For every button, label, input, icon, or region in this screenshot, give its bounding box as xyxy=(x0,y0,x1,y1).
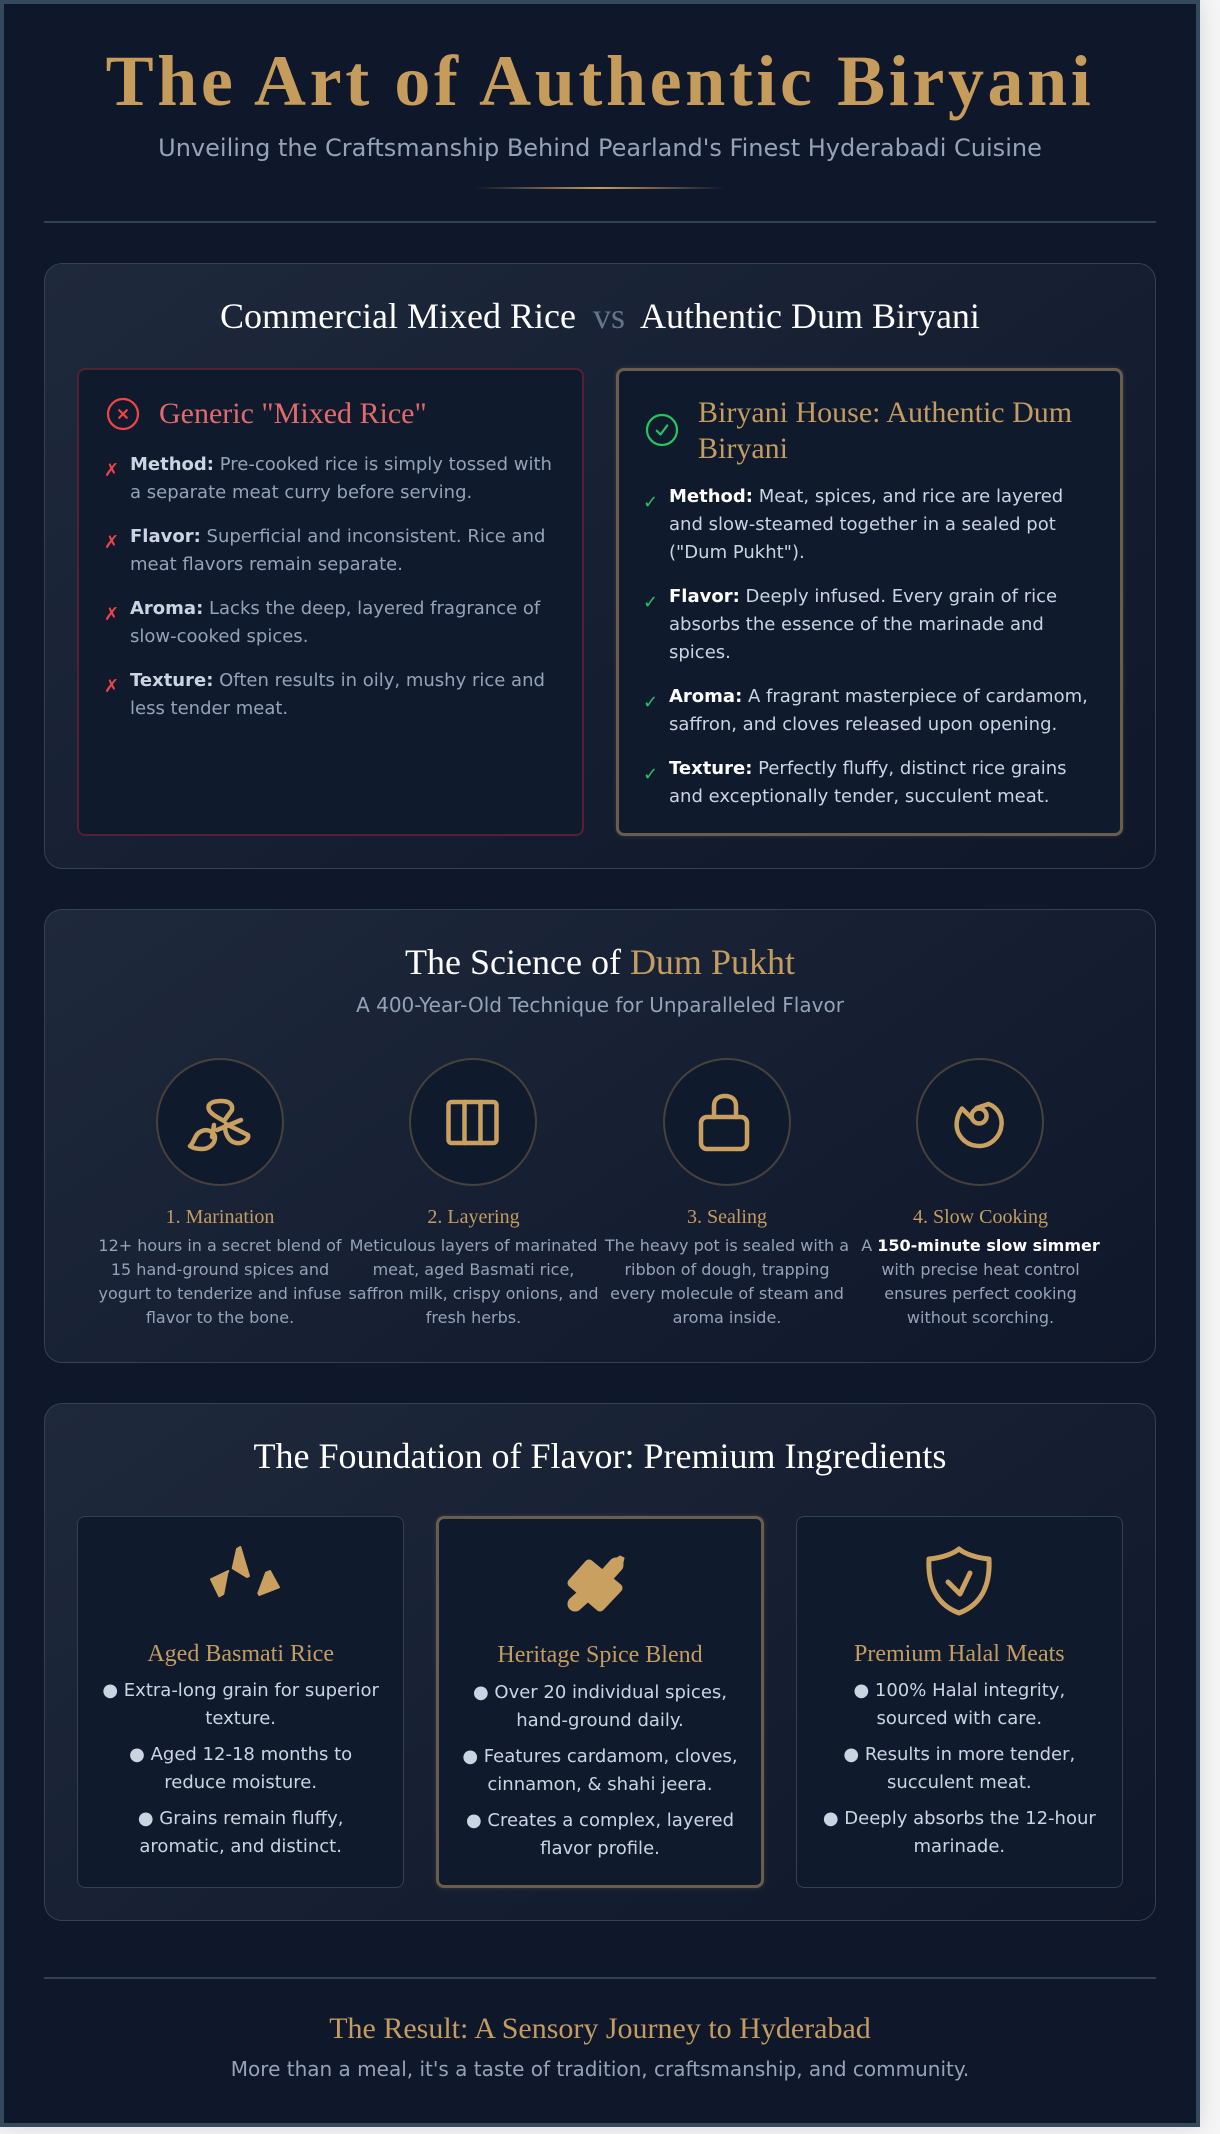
card: generic mixed rice: ✗ xyxy=(104,604,119,625)
item: flavor xyxy=(643,586,1057,663)
heading: science: The Science of Dum Pukht xyxy=(405,942,795,982)
icon: cross circle xyxy=(106,398,140,430)
item xyxy=(843,1744,1075,1793)
footer text: More than a meal, it's a taste of tradition, craftsmanship, and community. xyxy=(231,2057,969,2081)
card: premium halal meats xyxy=(796,1516,1123,1888)
item: aroma: Aroma: Lacks the deep, layered fragrance of xyxy=(130,598,540,619)
card: aged basmati rice xyxy=(77,1516,404,1888)
item: flavor profile. xyxy=(540,1838,660,1859)
item xyxy=(129,1744,352,1793)
step text: fresh herbs. xyxy=(426,1308,521,1327)
step text: ensures perfect cooking xyxy=(884,1284,1077,1303)
card title: Biryani House: Authentic Dum xyxy=(698,396,1072,429)
step text: meat, aged Basmati rice, xyxy=(373,1260,574,1279)
item xyxy=(102,1680,379,1729)
icon: lock xyxy=(662,1058,790,1186)
panel: comparison xyxy=(44,263,1156,869)
step text: without scorching. xyxy=(907,1308,1054,1327)
item: aroma: saffron, and cloves released upon opening. xyxy=(669,714,1057,735)
item: method xyxy=(104,454,552,503)
item: method: and slow-steamed together in a sealed pot xyxy=(669,514,1056,535)
item: ● Deeply absorbs the 12-hour xyxy=(823,1808,1096,1829)
step text: A 150-minute slow simmer xyxy=(861,1236,1100,1255)
step text: aroma inside. xyxy=(673,1308,781,1327)
step title: 3. Sealing xyxy=(687,1206,767,1228)
item: texture. xyxy=(205,1708,276,1729)
icon: check circle xyxy=(646,414,678,446)
item: texture: Texture: Often results in oily, mushy rice and xyxy=(130,670,545,691)
icon: layers xyxy=(409,1058,537,1186)
step text: Meticulous layers of marinated xyxy=(350,1236,597,1255)
item: aroma xyxy=(104,598,541,647)
item xyxy=(138,1808,343,1857)
title: The Art of Authentic Biryani xyxy=(106,41,1094,121)
item: ● Grains remain fluffy, xyxy=(138,1808,343,1829)
item: texture: and exceptionally tender, succulent meat. xyxy=(669,786,1050,807)
step text xyxy=(861,1236,1100,1327)
card: generic mixed rice: ✗ xyxy=(104,532,119,553)
item: flavor: Flavor: Superficial and inconsistent. Rice and xyxy=(130,526,545,547)
item xyxy=(466,1810,734,1859)
item: cinnamon, & shahi jeera. xyxy=(487,1774,713,1795)
item: aroma: Aroma: A fragrant masterpiece of cardamom, xyxy=(669,686,1088,707)
step text: saffron milk, crispy onions, and xyxy=(348,1284,599,1303)
item: ● Over 20 individual spices, xyxy=(473,1682,727,1703)
step text: yogurt to tenderize and infuse xyxy=(98,1284,341,1303)
step title: 1. Marination xyxy=(166,1206,274,1228)
step text: 15 hand-ground spices and xyxy=(111,1260,329,1279)
card: generic mixed rice: ✗ xyxy=(104,676,119,697)
item xyxy=(473,1682,727,1731)
item: ● Results in more tender, xyxy=(843,1744,1075,1765)
header xyxy=(44,36,1156,223)
item: ● Aged 12-18 months to xyxy=(129,1744,352,1765)
section subtitle: A 400-Year-Old Technique for Unparalleled Flavor xyxy=(356,993,844,1017)
card title: Biryani xyxy=(698,432,788,465)
item: hand-ground daily. xyxy=(516,1710,684,1731)
item: flavor: Flavor: Deeply infused. Every grain of rice xyxy=(669,586,1057,607)
item: aroma: slow-cooked spices. xyxy=(130,626,308,647)
accent divider xyxy=(475,187,725,189)
card: generic mixed rice: ✗ xyxy=(104,460,119,481)
item: marinade. xyxy=(914,1836,1005,1857)
card: authentic dum biryani: ✓ xyxy=(643,692,658,713)
item: ● Extra-long grain for superior xyxy=(102,1680,379,1701)
item: method: Method: Pre-cooked rice is simply tossed with xyxy=(130,454,552,475)
card title: Heritage Spice Blend xyxy=(497,1642,703,1668)
heading: comparison: Commercial Mixed Rice vs Authentic Dum Biryani xyxy=(220,296,980,336)
step title: 4. Slow Cooking xyxy=(913,1206,1048,1228)
icon: rice grains xyxy=(210,1546,280,1598)
step text: with precise heat control xyxy=(881,1260,1080,1279)
card: authentic dum biryani: ✓ xyxy=(643,492,658,513)
item: texture: Texture: Perfectly fluffy, distinct rice grains xyxy=(669,758,1066,779)
step: slow cooking xyxy=(861,1058,1100,1327)
step title: 2. Layering xyxy=(427,1206,520,1228)
step: sealing xyxy=(604,1058,849,1327)
item: ● Features cardamom, cloves, xyxy=(462,1746,738,1767)
footer heading: The Result: A Sensory Journey to Hyderabad xyxy=(329,2012,871,2045)
item: texture xyxy=(104,670,545,719)
card: authentic dum biryani: ✓ xyxy=(643,592,658,613)
card: heritage spice blend xyxy=(436,1516,764,1888)
item: ● Creates a complex, layered xyxy=(466,1810,734,1831)
step text: flavor to the bone. xyxy=(146,1308,294,1327)
item: reduce moisture. xyxy=(164,1772,317,1793)
item: texture: less tender meat. xyxy=(130,698,288,719)
subtitle: Unveiling the Craftsmanship Behind Pearland's Finest Hyderabadi Cuisine xyxy=(158,134,1042,162)
card title: Premium Halal Meats xyxy=(854,1641,1065,1667)
item: succulent meat. xyxy=(887,1772,1032,1793)
footer xyxy=(44,1977,1156,2107)
item: flavor xyxy=(104,526,545,575)
step text: ribbon of dough, trapping xyxy=(624,1260,830,1279)
card: authentic dum biryani xyxy=(616,368,1123,836)
step text xyxy=(98,1236,342,1327)
step text xyxy=(348,1236,599,1327)
item: sourced with care. xyxy=(877,1708,1042,1729)
card title: Aged Basmati Rice xyxy=(147,1641,334,1667)
item: aromatic, and distinct. xyxy=(139,1836,342,1857)
item: method: ("Dum Pukht"). xyxy=(669,542,805,563)
item: aroma xyxy=(643,686,1088,735)
item: method: Method: Meat, spices, and rice are layered xyxy=(669,486,1063,507)
step text: every molecule of steam and xyxy=(610,1284,844,1303)
panel: science of dum pukht xyxy=(44,909,1156,1363)
icon: spice block xyxy=(568,1556,624,1612)
icon: herb leaves xyxy=(156,1058,284,1186)
icon: flame xyxy=(916,1058,1044,1186)
card: generic mixed rice xyxy=(77,368,584,836)
step: marination xyxy=(98,1058,342,1327)
step text: The heavy pot is sealed with a xyxy=(605,1236,849,1255)
item xyxy=(823,1808,1096,1857)
item xyxy=(462,1746,738,1795)
item: method xyxy=(643,486,1063,563)
item: flavor: absorbs the essence of the marinade and xyxy=(669,614,1044,635)
item: flavor: meat flavors remain separate. xyxy=(130,554,403,575)
item: method: a separate meat curry before serving. xyxy=(130,482,472,503)
icon: shield check xyxy=(926,1546,992,1616)
card title: Generic "Mixed Rice" xyxy=(159,397,427,430)
panel: ingredients xyxy=(44,1403,1156,1921)
item: flavor: spices. xyxy=(669,642,731,663)
item: texture xyxy=(643,758,1066,807)
heading: ingredients: The Foundation of Flavor: Premium Ingredients xyxy=(254,1436,946,1476)
step text: 12+ hours in a secret blend of xyxy=(98,1236,342,1255)
item xyxy=(853,1680,1065,1729)
item: ● 100% Halal integrity, xyxy=(853,1680,1065,1701)
card title xyxy=(698,396,1072,465)
step: layering xyxy=(348,1058,599,1327)
card: authentic dum biryani: ✓ xyxy=(643,764,658,785)
step text xyxy=(604,1236,849,1327)
